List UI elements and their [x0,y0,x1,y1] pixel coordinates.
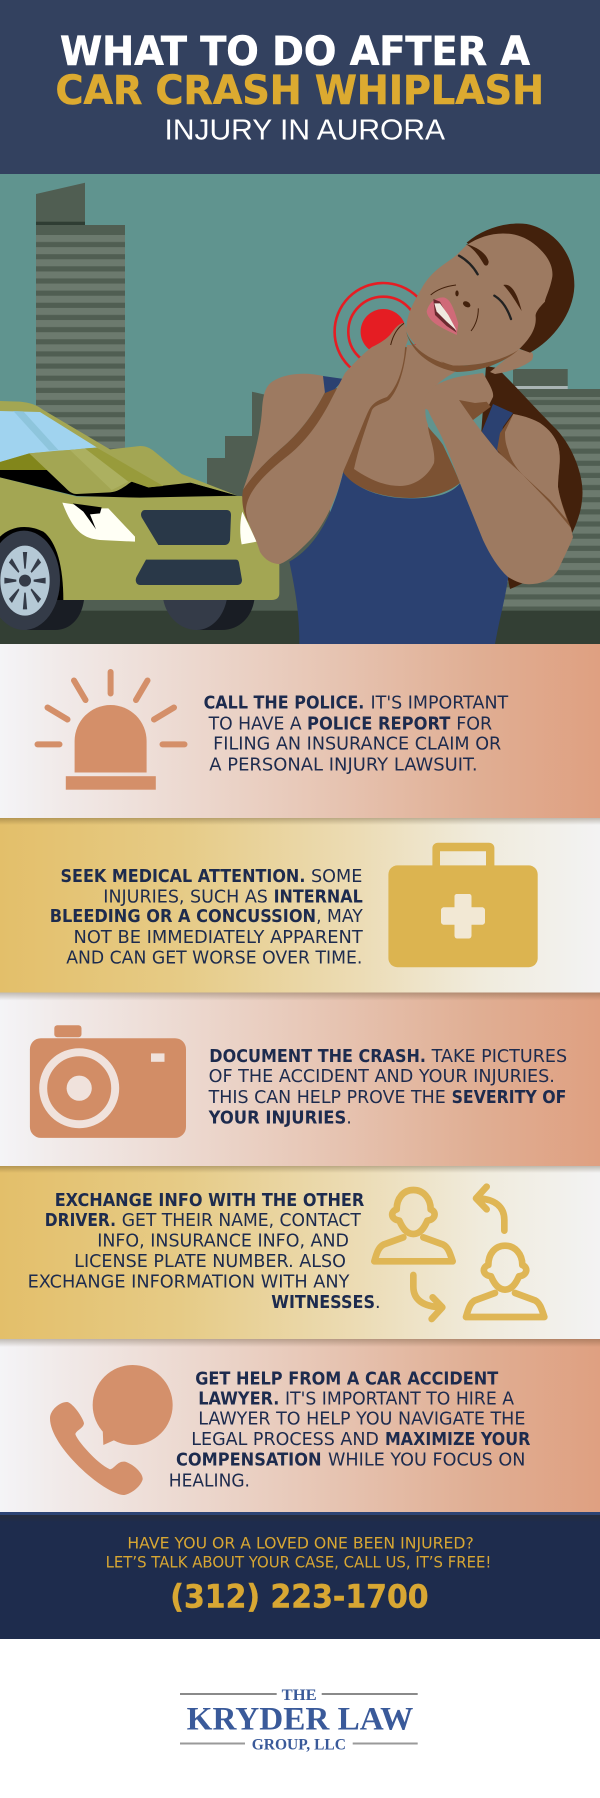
upper grille [141,510,231,545]
right upper arm [497,414,571,528]
pain rings [335,283,432,380]
rear tyre shadow [27,600,84,630]
step 1 text: IT'S IMPORTANT [370,694,509,714]
building left [36,183,125,455]
logo: The Kryder Law Group: GROUP, LLC [252,1736,346,1753]
ground [0,611,600,644]
hero illustration [0,174,600,644]
nose and creases [431,285,478,331]
title line 2: CAR CRASH WHIPLASH [56,68,544,114]
title line 3: INJURY IN AURORA [164,114,445,146]
step 1 panel: call the police [0,644,600,818]
arrow down-right [413,1275,442,1319]
call to action panel [0,1512,600,1639]
step 5 text: MAXIMIZE YOUR [385,1430,531,1450]
car body [0,477,279,600]
logo: The Kryder Law Group [0,1639,600,1798]
step 1 text: POLICE REPORT [307,715,450,735]
title line 1: WHAT TO DO AFTER A [60,29,530,75]
woman [242,224,583,644]
right strap [482,404,513,452]
right forearm and fist [422,373,573,584]
long hair [480,366,583,589]
step 4 text: WITNESSES [271,1293,375,1313]
step 1 text: CALL THE POLICE. [204,694,364,714]
dress [289,472,508,644]
logo: The Kryder Law Group: KRYDER LAW [187,1701,413,1737]
step 4 text [28,1191,381,1313]
person 1 [374,1190,453,1261]
step 5 text: COMPENSATION [176,1451,322,1471]
mouth [427,297,458,335]
step 3 text: YOUR INJURIES [208,1108,346,1128]
step 3 text: OF THE ACCIDENT AND YOUR INJURIES. [209,1067,555,1087]
step 5 text: GET HELP FROM A CAR ACCIDENT [195,1370,498,1390]
step 2 panel: seek medical attention [0,818,600,992]
face [406,233,552,366]
step 2 text: INTERNAL [274,887,363,907]
step 5 text: IT'S IMPORTANT TO HIRE A [285,1390,514,1410]
eyebrows [466,244,522,311]
step 2 text: SEEK MEDICAL ATTENTION. [60,867,305,887]
hair on head [467,224,574,353]
neck creases [391,323,404,345]
step 2 text: BLEEDING OR A CONCUSSION [50,907,316,927]
step 5 text: HEALING. [169,1472,250,1492]
step 5 text: LAWYER. [198,1390,279,1410]
step 4 text: EXCHANGE INFO WITH THE OTHER [55,1191,365,1211]
lower grille [136,560,242,585]
step 3 text: DOCUMENT THE CRASH. [209,1047,426,1067]
step 4 text: GET THEIR NAME, CONTACT [122,1211,361,1231]
chest shadow [343,345,460,498]
step 3 text: TAKE PICTURES [431,1047,567,1067]
step 2 text: NOT BE IMMEDIATELY APPARENT [74,928,363,948]
windshield [0,411,98,462]
head [391,224,574,372]
step 1 text: A PERSONAL INJURY LAWSUIT. [209,756,478,776]
step 3 text: SEVERITY OF [452,1088,566,1108]
logo: The Kryder Law Group: THE [282,1687,317,1704]
right headlight [240,512,257,544]
left headlight [62,503,135,542]
step 2 text: SOME [311,867,362,887]
step 5 text: LEGAL PROCESS AND [191,1430,379,1450]
left arm [242,323,408,564]
rear wheel [0,527,63,630]
step 3 text [208,1047,567,1128]
step 2 text: , MAY [316,907,363,927]
chest and neck [354,345,455,486]
step 1 text [204,694,509,776]
roof [0,401,110,463]
step 3 panel: document the crash [0,992,600,1166]
step 4 panel: exchange info [0,1166,600,1339]
finger under jaw [490,349,533,374]
step 5 panel: get help [0,1339,600,1512]
hood gap [0,470,237,498]
step 3 text: THIS CAN HELP PROVE THE [208,1088,446,1108]
car [0,401,279,630]
building right [500,369,600,611]
person 2 [466,1246,544,1317]
cta text: HAVE YOU OR A LOVED ONE BEEN INJURED? [127,1533,474,1552]
building centre steps [0,392,330,611]
step 4 text: INFO, INSURANCE INFO, AND [97,1231,349,1251]
step 2 text [50,867,363,968]
icon: first aid kit [388,843,538,967]
step 4 text: LICENSE PLATE NUMBER. ALSO [74,1252,346,1272]
step 4 text: DRIVER. [45,1211,116,1231]
step 5 text [169,1370,531,1492]
crumpled hood [29,446,237,496]
phone number: (312) 223-1700 [170,1577,429,1615]
header panel [0,0,600,174]
icon: siren [38,672,184,790]
step 1 text: TO HAVE A [208,715,302,735]
dark hood fold [0,453,48,470]
step 2 text: AND CAN GET WORSE OVER TIME. [66,948,362,968]
step 5 text: WHILE YOU FOCUS ON [328,1451,525,1471]
step 2 text: INJURIES, SUCH AS [103,887,268,907]
closed eyes [459,256,511,319]
arrow up-left [476,1187,504,1231]
cta text line 2: LET’S TALK ABOUT YOUR CASE, CALL US, IT’S FREE! [106,1552,491,1571]
step 4 text: EXCHANGE INFORMATION WITH ANY [28,1272,350,1292]
jaw shadow [406,332,518,372]
front wheel [163,600,254,630]
step 3 text: . [346,1108,352,1128]
icon: camera [30,1025,186,1138]
step 5 text: LAWYER TO HELP YOU NAVIGATE THE [198,1410,525,1430]
step 1 text: FILING AN INSURANCE CLAIM OR [213,734,501,754]
step 1 text: FOR [456,715,492,735]
step 4 text: . [375,1293,381,1313]
icon: two people exchanging [374,1187,544,1319]
icon: phone and speech bubble [50,1365,173,1495]
